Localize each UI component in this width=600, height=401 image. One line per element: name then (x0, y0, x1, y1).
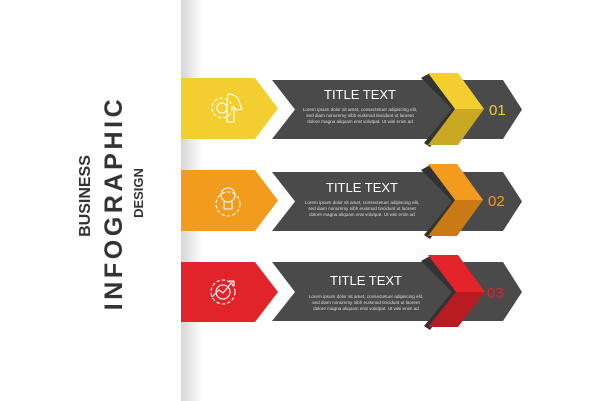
main arrow (272, 262, 522, 321)
chevron 3d (421, 256, 458, 330)
body text: Lorem ipsum dolor sit amet, consectetuer adipiscing elit, (303, 107, 417, 112)
icon: lightbulb gear (216, 188, 240, 216)
icon tab: yellow (181, 78, 278, 139)
title: vertical heading (77, 96, 146, 310)
row 3 (181, 255, 522, 330)
body text: dolore magna aliquam erat volutpat. Ut wisi enim ad (307, 119, 413, 124)
title: vertical heading: BUSINESS (77, 155, 94, 237)
body text: dolore magna aliquam erat volutpat. Ut wisi enim ad (309, 212, 415, 217)
row 1 (181, 73, 522, 147)
icon tab: orange (181, 170, 278, 231)
body text: Lorem ipsum dolor sit amet, consectetuer adipiscing elit, (305, 200, 419, 205)
number: 01 (489, 102, 506, 119)
number: 02 (488, 193, 505, 210)
main arrow (272, 80, 522, 139)
body text: sed diam nonummy nibh euismod tincidunt ut laoreet (312, 300, 420, 305)
body text (303, 107, 417, 124)
chevron 3d (421, 73, 458, 147)
title text: TITLE TEXT (324, 87, 396, 102)
icon: gear with growth arrow (211, 280, 235, 304)
number: 03 (487, 285, 504, 302)
body text: Lorem ipsum dolor sit amet, consectetuer adipiscing elit, (309, 294, 423, 299)
title text: TITLE TEXT (330, 273, 402, 288)
icon: gear and chess knight (212, 94, 242, 122)
title text: TITLE TEXT (326, 180, 398, 195)
body text (305, 200, 419, 217)
body text (309, 294, 423, 311)
row 2 (181, 164, 522, 239)
body text: sed diam nonummy nibh euismod tincidunt ut laoreet (308, 206, 416, 211)
icon tab: red (181, 262, 278, 322)
chevron 3d (421, 165, 458, 239)
title: vertical heading: INFOGRAPHIC (100, 96, 128, 310)
body text: dolore magna aliquam erat volutpat. Ut wisi enim ad (313, 306, 419, 311)
main arrow (272, 172, 522, 231)
title: vertical heading: DESIGN (131, 168, 146, 218)
body text: sed diam nonummy nibh euismod tincidunt ut laoreet (306, 113, 414, 118)
